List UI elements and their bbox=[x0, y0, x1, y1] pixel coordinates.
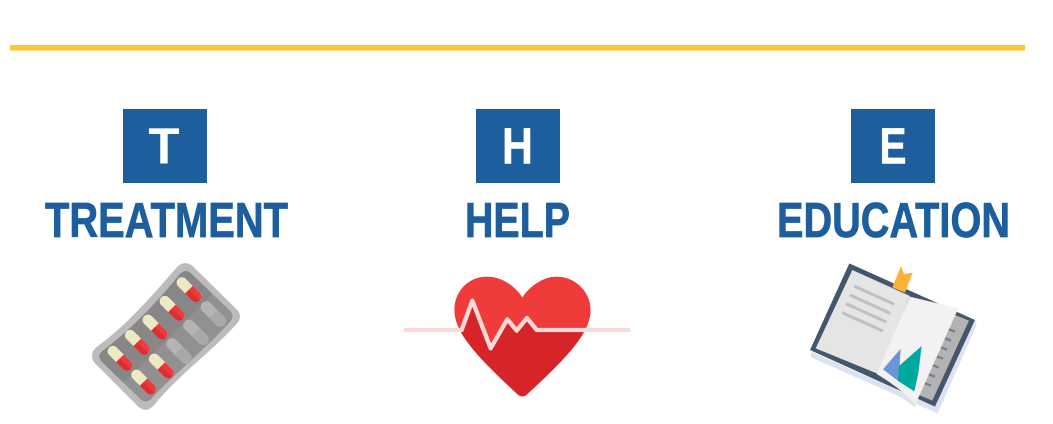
yellow divider bbox=[10, 45, 1025, 50]
letter tile E: E bbox=[879, 117, 907, 175]
column: education bbox=[777, 109, 1010, 413]
icon: heart with pulse line bbox=[406, 273, 628, 400]
letter tile H bbox=[476, 109, 560, 183]
icon: blister pack bbox=[90, 263, 243, 410]
letter tile H: H bbox=[502, 117, 533, 174]
column: help bbox=[406, 109, 628, 400]
heading: help: HELP bbox=[465, 194, 570, 248]
icon: open book bbox=[810, 263, 977, 413]
letter tile T: T bbox=[148, 118, 180, 174]
heading: treatment: TREATMENT bbox=[45, 194, 288, 248]
letter tile T bbox=[123, 109, 207, 183]
column: treatment bbox=[45, 109, 288, 410]
letter tile E bbox=[851, 109, 935, 183]
